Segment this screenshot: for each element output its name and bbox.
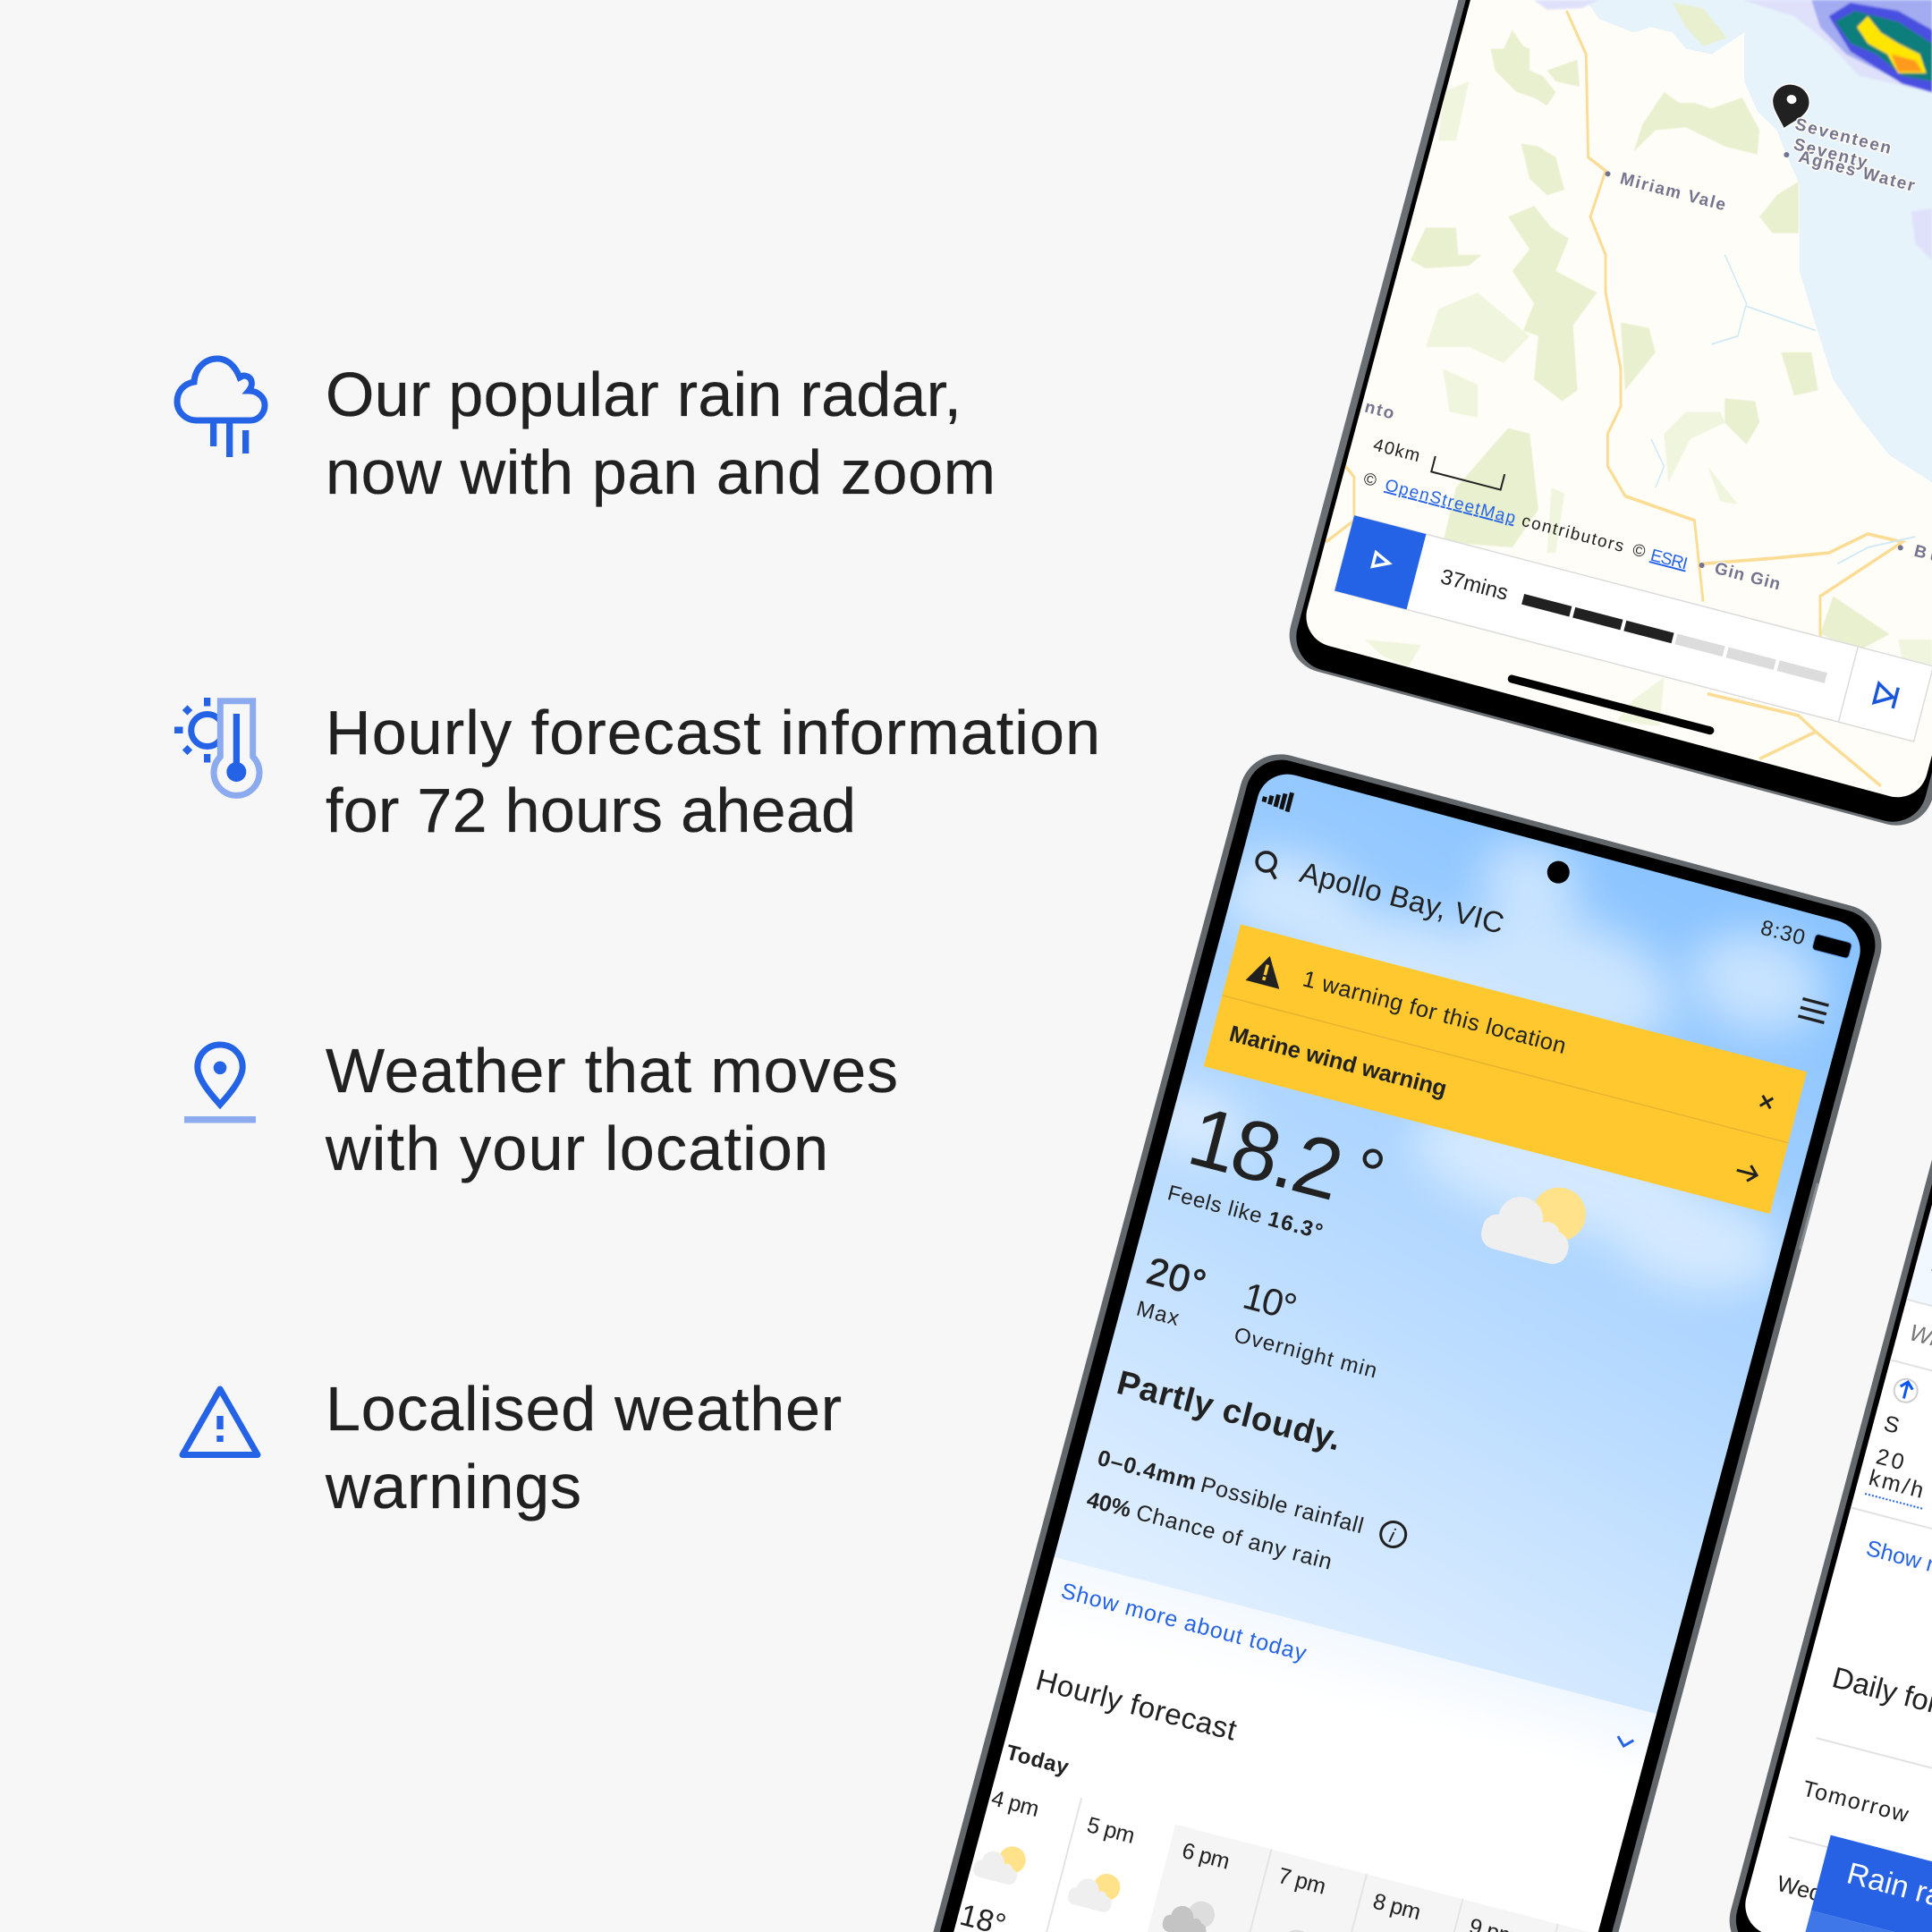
hour labels (987, 1785, 1521, 1932)
show more link: Show more about today (1058, 1579, 1309, 1666)
hourly table (926, 1775, 1626, 1932)
hour labels: 5 pm (1084, 1812, 1138, 1849)
icon: search (1253, 851, 1282, 879)
phone frame (1720, 1030, 1932, 1932)
map attribution: © (1361, 470, 1378, 491)
scale bar (1370, 436, 1506, 490)
current temperature: Feels like (1165, 1181, 1265, 1228)
icon: location pin on map (1771, 83, 1810, 130)
current temperature: ° (1345, 1131, 1393, 1216)
hour labels: 8 pm (1370, 1889, 1423, 1925)
side buttons (1799, 1182, 1819, 1250)
rainfall details (1084, 1445, 1409, 1591)
max and overnight temperatures: Overnight min (1232, 1323, 1379, 1383)
heading: location (325, 1036, 898, 1183)
map labels and controls (1334, 117, 1932, 742)
hour labels: 7 pm (1275, 1863, 1328, 1900)
icon: warning triangle (182, 1389, 258, 1454)
rainfall details: 0–0.4mm (1095, 1445, 1199, 1496)
hourly forecast heading: Hourly forecast (1032, 1663, 1240, 1747)
forecast rows: Wed (1775, 1871, 1825, 1907)
max and overnight temperatures (1134, 1249, 1392, 1383)
feature 4: warnings (182, 1374, 842, 1521)
max and overnight temperatures: 10° (1239, 1275, 1301, 1328)
map artwork (1326, 0, 1932, 786)
phone frame (856, 745, 1891, 1932)
rainfall details: Possible rainfall (1198, 1472, 1366, 1538)
map screen (1306, 0, 1932, 798)
icon: close (1760, 1096, 1773, 1108)
icon: sun and thermometer (174, 698, 259, 795)
play button (1335, 515, 1426, 609)
hour labels: 4 pm (988, 1785, 1042, 1822)
warning banner: 1 warning for this location (1301, 967, 1569, 1059)
signal (1261, 792, 1294, 812)
radar timeline panel (1335, 515, 1932, 741)
screen (953, 775, 1860, 1932)
wind values: S (1881, 1411, 1902, 1439)
forecast rows: Tomorrow (1800, 1776, 1911, 1827)
heading: warnings: Localised weather (326, 1374, 842, 1444)
warning banner (1204, 924, 1807, 1214)
rainfall details: Chance of any rain (1133, 1500, 1335, 1575)
heading: warnings (325, 1374, 842, 1521)
progress bar (1521, 594, 1827, 683)
heading: hourly forecast: for 72 hours ahead (326, 775, 856, 845)
today label: Today (1004, 1741, 1072, 1780)
wind values: 20 (1874, 1444, 1907, 1475)
map attribution: ESRI (1648, 547, 1690, 574)
icon: info: i (1387, 1524, 1398, 1547)
feature 2: hourly forecast (174, 698, 1100, 845)
feature 3: location (184, 1036, 898, 1183)
current temperature: 16.3° (1266, 1207, 1326, 1244)
map labels: Seventeen (1793, 115, 1893, 158)
icon: info (1378, 1519, 1409, 1550)
scale bar: 40km (1371, 436, 1422, 466)
heading: rain radar: Our popular rain radar, (326, 360, 962, 429)
map labels: Miriam Vale (1618, 169, 1727, 215)
map labels: nto (1362, 398, 1396, 423)
phone: today forecast (934, 754, 1882, 1932)
map attribution: OpenStreetMap (1383, 476, 1518, 528)
battery (1812, 934, 1852, 959)
map labels: Agnes Water (1797, 148, 1917, 196)
radar rain (1534, 0, 1932, 260)
heading: rain radar: now with pan and zoom (326, 437, 996, 507)
feature 1: rain radar (177, 359, 996, 507)
forecast rows (1780, 1780, 1909, 1900)
location header: Apollo Bay, VIC (1297, 855, 1507, 940)
location header (1253, 843, 1832, 1024)
heading: location: Weather that moves (326, 1036, 898, 1106)
icon: arrow (1734, 1162, 1758, 1183)
wind values (1864, 1417, 1923, 1510)
map labels: Gin Gin (1713, 559, 1783, 594)
rainfall details: 40% (1084, 1487, 1134, 1522)
time: 8:30 (1758, 916, 1808, 950)
sky background (1030, 775, 1860, 1805)
map labels (1365, 117, 1932, 590)
wind values: km/h (1866, 1465, 1926, 1504)
status bar (1259, 784, 1853, 962)
icon: menu (1798, 999, 1828, 1022)
heading: warnings: warnings (325, 1452, 581, 1521)
phone: daily forecast (partial) (1730, 1159, 1932, 1932)
camera hole (1547, 860, 1570, 884)
heading: rain radar (326, 360, 996, 507)
map attribution (1361, 470, 1690, 574)
hourly icons (970, 1838, 1315, 1932)
warning banner: Marine wind warning (1226, 1021, 1449, 1102)
phone: rain radar map (1252, 0, 1932, 859)
map attribution: © (1631, 540, 1648, 562)
hour labels: 6 pm (1180, 1838, 1233, 1875)
forecast summary: Partly cloudy. (1113, 1364, 1345, 1458)
time label: 37mins (1438, 564, 1511, 606)
current temperature (1165, 1087, 1393, 1256)
icon: partly cloudy large (1478, 1171, 1591, 1269)
icon: skip to end (1874, 682, 1898, 708)
phone frame (1281, 0, 1932, 834)
icon: chevron (1616, 1736, 1633, 1748)
rain radar button (1798, 1835, 1932, 1932)
icon: wind direction (1893, 1377, 1919, 1403)
icon: rain cloud (177, 359, 265, 457)
screen content (1745, 1204, 1932, 1932)
heading: location: with your location (325, 1114, 828, 1183)
icon: warning (1246, 952, 1287, 989)
home indicator (1507, 674, 1715, 735)
heading: hourly forecast (326, 698, 1100, 845)
feature list (174, 359, 1100, 1521)
icon: location pin (184, 1045, 256, 1123)
white lower section (831, 1545, 1716, 1932)
max and overnight temperatures: 20° (1143, 1250, 1210, 1305)
map attribution: contributors (1520, 512, 1626, 556)
max and overnight temperatures: Max (1134, 1297, 1182, 1331)
heading: hourly forecast: Hourly forecast information (326, 698, 1100, 767)
current temperature: 18.2 (1180, 1089, 1352, 1218)
map labels: Seventy (1792, 135, 1869, 173)
